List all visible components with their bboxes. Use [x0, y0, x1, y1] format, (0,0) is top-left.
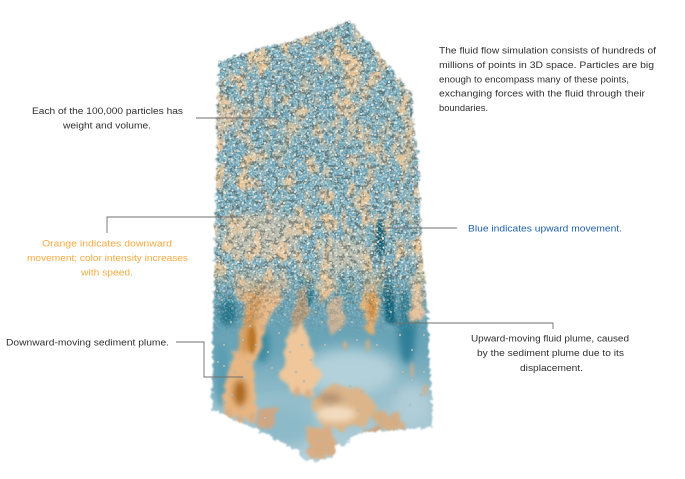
leader line: particles: [196, 98, 275, 118]
text: orange legend: with speed.: [80, 268, 133, 278]
illustration: 3D fluid column with sediment particles: [200, 10, 440, 470]
scattered particles in lower part: [217, 271, 425, 449]
orange plumes in lower part: [222, 258, 426, 458]
placed orange and blue patches: [217, 55, 414, 271]
text: orange legend: movement; color intensity increases: [27, 253, 188, 264]
fluid volume base: [209, 264, 434, 464]
text: orange legend: Orange indicates downward: [42, 238, 172, 250]
text: particles note: [32, 106, 183, 132]
text: fluid simulation description: exchanging forces with the fluid through their: [439, 88, 646, 100]
darker orange plume cores: [234, 280, 376, 422]
text: upward plume note: displacement.: [520, 363, 583, 374]
lower blue shading: [212, 266, 432, 449]
text: fluid simulation description: boundaries.: [439, 103, 488, 114]
text: fluid simulation description: enough to encompass many of these points,: [439, 74, 629, 86]
text: upward plume note: by the sediment plume due to its: [477, 348, 624, 359]
leader line: blue: [385, 227, 457, 229]
text: blue legend: Blue indicates upward movement.: [468, 224, 622, 234]
leader line: downward plume: [176, 342, 243, 377]
text: upward plume note: [471, 334, 629, 374]
text: fluid simulation description: [439, 46, 656, 114]
text: downward plume note: Downward-moving sediment plume.: [6, 338, 169, 348]
text: orange legend: [27, 238, 188, 278]
dense particle field: [212, 20, 430, 332]
text: fluid simulation description: The fluid flow simulation consists of hundreds of: [439, 46, 656, 56]
dark gaps between particles: [212, 20, 427, 329]
text: particles note: Each of the 100,000 particles has: [32, 106, 183, 117]
text: fluid simulation description: millions of points in 3D space. Particles are big: [439, 60, 654, 71]
dark streak over mottled region: [375, 218, 385, 258]
leader line: orange: [107, 217, 243, 233]
text: upward plume note: Upward-moving fluid plume, caused: [471, 334, 629, 344]
mottled upper region: [212, 20, 426, 298]
leader line: upward plume: [393, 323, 553, 329]
plume foot fingers and drips: [224, 339, 427, 462]
text: particles note: weight and volume.: [62, 120, 151, 132]
